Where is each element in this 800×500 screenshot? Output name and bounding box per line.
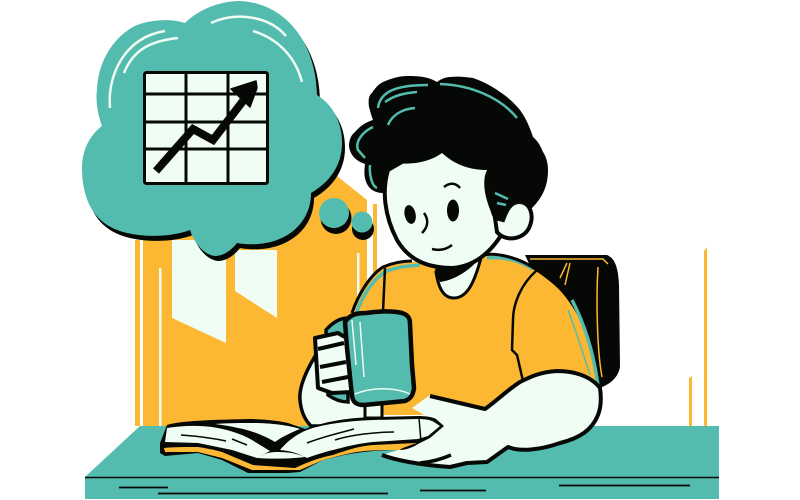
thought bubbles [319, 198, 374, 240]
wrist under mug [365, 403, 382, 418]
chair [525, 255, 620, 388]
growth chart icon [144, 72, 268, 184]
background building [135, 176, 377, 426]
left forearm [300, 358, 372, 426]
hair highlights [357, 84, 517, 205]
right background strips [689, 247, 707, 426]
thought cloud [82, 1, 345, 261]
torso with orange shirt [340, 254, 600, 415]
coffee mug and hand [315, 312, 414, 405]
right arm and hand [382, 371, 601, 468]
open book [160, 416, 444, 473]
hair [349, 76, 548, 222]
ear [495, 202, 532, 238]
table [85, 426, 719, 499]
eyes, nose and mouth [403, 184, 460, 250]
head [349, 76, 548, 268]
